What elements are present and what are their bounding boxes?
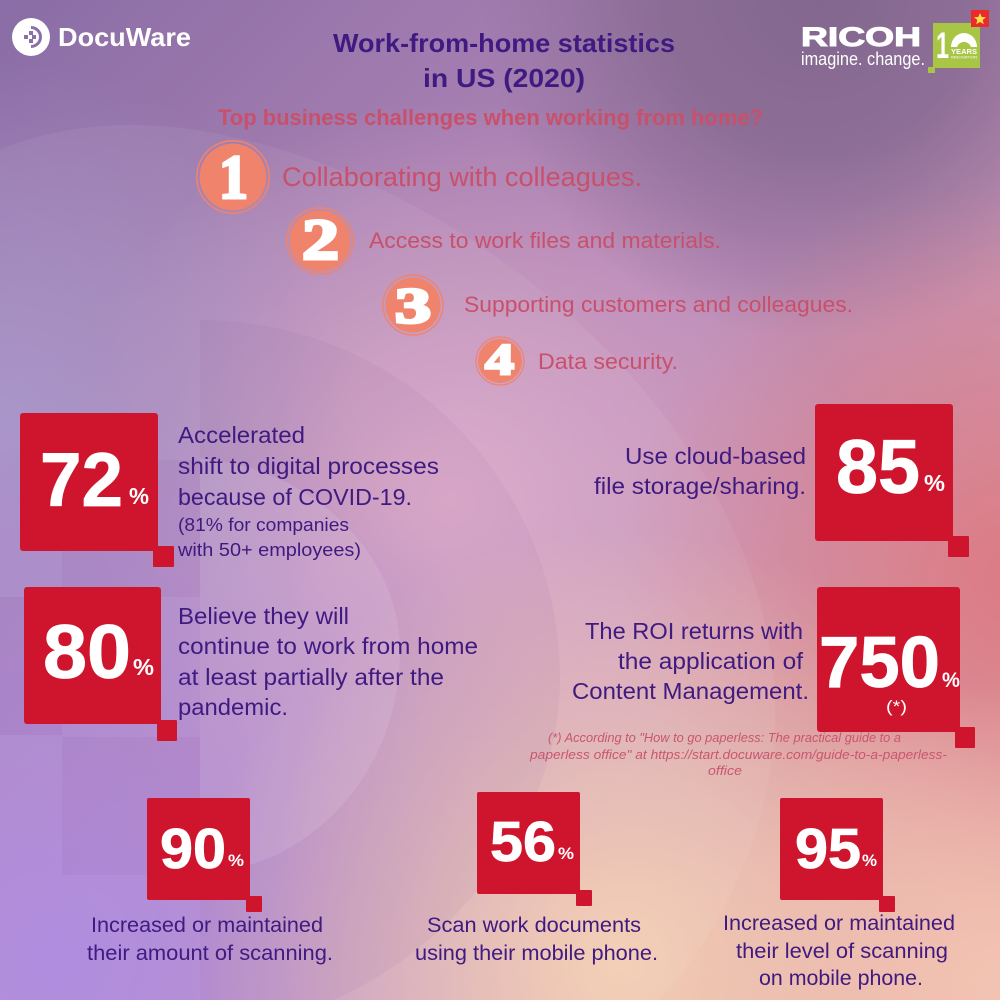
stat: 85%: % — [924, 470, 945, 496]
challenge 4: Data security. — [538, 349, 678, 374]
stat: 80%: 80 — [43, 610, 131, 695]
text: 85% — [594, 443, 806, 499]
title: in US (2020) — [423, 63, 585, 93]
stat: 750%: 750 — [819, 623, 940, 703]
stat: 72% — [20, 413, 174, 567]
stat: 72%: % — [129, 483, 149, 509]
stat: 95%: 95 — [795, 817, 861, 881]
text: 56%: using their mobile phone. — [415, 942, 658, 965]
stat: 85% — [815, 404, 969, 557]
text: 750%: Content Management. — [572, 678, 809, 704]
text: 56% — [415, 914, 658, 965]
text: 90%: Increased or maintained — [91, 914, 323, 937]
stat: 95%: % — [862, 851, 877, 870]
stat: 90% — [147, 798, 262, 912]
text: 750% — [572, 618, 809, 704]
text: 95% — [723, 912, 955, 990]
text: 95%: Increased or maintained — [723, 912, 955, 935]
challenge 2 — [287, 207, 721, 274]
challenge 2: Access to work files and materials. — [369, 228, 721, 253]
text: 750%: The ROI returns with — [585, 618, 803, 644]
stat: 750%: % — [942, 669, 960, 692]
title: Work-from-home statistics — [333, 28, 675, 58]
text: 95%: on mobile phone. — [759, 967, 923, 990]
stat: 750%: (*) — [886, 697, 907, 716]
logo: DocuWare — [12, 18, 191, 56]
logo: Ricoh 10 years: INNOVATION — [951, 54, 977, 60]
stat: 56%: 56 — [490, 810, 556, 874]
logo: Ricoh 10 years: RICOH — [801, 22, 921, 52]
logo: Ricoh 10 years: imagine. change. — [801, 49, 925, 69]
stat: 95% — [780, 798, 895, 912]
text: 72% — [177, 422, 439, 560]
text: 72%: because of COVID-19. — [178, 484, 412, 510]
text: 80%: Believe they will — [178, 603, 349, 629]
text: 72%: Accelerated — [178, 422, 305, 448]
stat: 80%: % — [133, 654, 154, 680]
challenge 1 — [197, 141, 642, 213]
text: 90% — [87, 914, 333, 965]
footnote: (*) According to "How to go paperless: The practical guide to a — [548, 731, 901, 745]
footnote: paperless office" at https://start.docuware.com/guide-to-a-paperless- — [529, 748, 947, 762]
text: 90%: their amount of scanning. — [87, 942, 333, 965]
text: 85%: Use cloud-based — [625, 443, 806, 469]
stat: 90%: 90 — [160, 817, 226, 881]
text: 80%: pandemic. — [178, 694, 288, 720]
challenge 4 — [476, 335, 678, 385]
title — [333, 28, 675, 93]
text: 85%: file storage/sharing. — [594, 473, 806, 499]
logo: DocuWare: DocuWare — [58, 22, 191, 52]
text: 80%: continue to work from home — [178, 633, 478, 659]
text: 80% — [178, 603, 478, 720]
stat: 56% — [477, 792, 592, 906]
text: 72%: (81% for companies — [178, 515, 349, 535]
stat: 90%: % — [228, 851, 244, 870]
text: 56%: Scan work documents — [427, 914, 641, 937]
text: 95%: their level of scanning — [736, 940, 948, 963]
challenge 1: 1 — [219, 144, 248, 212]
stat: 750% — [817, 587, 975, 748]
text: 72%: with 50+ employees) — [177, 540, 361, 560]
challenge 1: Collaborating with colleagues. — [282, 162, 642, 192]
challenge 2: 2 — [302, 207, 339, 272]
stat: 80% — [24, 587, 177, 741]
challenge 3: 3 — [395, 277, 431, 333]
footnote: office — [708, 764, 742, 778]
stat: 56%: % — [558, 844, 574, 863]
footnote — [529, 731, 947, 778]
stat: 85%: 85 — [836, 425, 920, 510]
logo: Ricoh 10 years — [801, 10, 989, 73]
challenge 3 — [383, 275, 853, 335]
logo: Ricoh 10 years: 1 — [936, 25, 949, 66]
challenge 4: 4 — [485, 335, 514, 384]
heading: top challenges: Top business challenges when working from home? — [218, 105, 763, 130]
stat: 72%: 72 — [40, 438, 123, 523]
text: 750%: the application of — [618, 648, 803, 674]
text: 80%: at least partially after the — [178, 664, 444, 690]
challenge 3: Supporting customers and colleagues. — [464, 292, 853, 317]
logo: Ricoh 10 years: YEARS — [951, 47, 977, 56]
text: 72%: shift to digital processes — [178, 453, 439, 479]
